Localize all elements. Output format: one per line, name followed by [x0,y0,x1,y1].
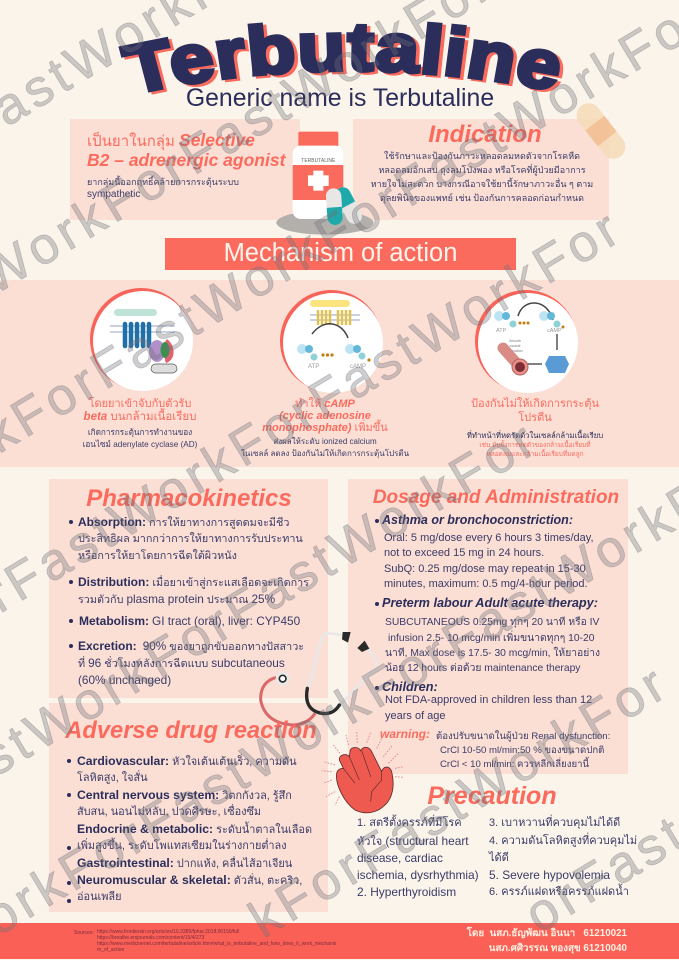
excretion: (60% unchanged) [78,673,171,687]
panel: pharmacokinetics [49,479,328,698]
precaution list: column two: 3. เบาหวานที่ควบคุมไม่ได้ดี [489,817,620,829]
indication heading: Indication [428,121,542,148]
icon: stethoscope [259,632,378,726]
subtitle: Generic name is Terbutaline [186,85,494,112]
sources: https://www.frontiersin.org/articles/10.3389/fphar.2018.00150/full [97,929,239,935]
preterm labour dosing: Preterm labour Adult acute therapy: [382,596,598,610]
icon: beta receptor [90,288,193,391]
text: step one: เกิดการกระตุ้นการทำงานของ [88,428,192,437]
icon: smooth muscle relaxation: muscle [509,344,521,348]
icon: smooth muscle relaxation [475,290,578,393]
sources [74,929,336,953]
drug class heading: B2 – adrenergic agonist [87,150,285,170]
text: step two: ส่งผลให้ระดับ ionized calcium [273,437,377,446]
text: step three: หลอดลมและกล้ามเนื้อเรียบที่มดลูก [486,451,584,458]
warning: warning: [380,727,430,741]
dosage heading: Dosage and Administration [373,487,619,508]
banner: mechanism of action: Mechanism of action [224,239,457,267]
text: step three [467,397,603,458]
precaution list: column one: หัวใจ (structural heart [357,834,469,848]
icon: cAMP conversion: cAMP [350,364,366,370]
indication text: หลอดลมอักเสบ ถุงลมโป่งพอง หรือโรคที่ผู้ป่วยมีอาการ [378,165,586,175]
footer [0,923,679,959]
title: Terbutaline [124,24,564,95]
icon: raised hand [322,732,403,814]
asthma dosing: SubQ: 0.25 mg/dose may repeat in 15-30 [384,563,586,575]
authors: นสภ.ศศิวรรณ ทองสุข 61210040 [489,943,627,954]
pharmacokinetics heading: Pharmacokinetics [86,485,292,512]
precaution list: column one: ischemia, dysrhythmia) [357,868,479,882]
icon: smooth muscle relaxation: ATP [496,328,507,334]
banner: mechanism of action [165,238,516,270]
precaution list: column two: 4. ความดันโลหิตสูงที่ควบคุมไม่ [489,835,637,847]
children dosing [375,680,592,722]
warning [380,727,610,770]
warning: CrCl < 10 ml/min: ควรหลีกเลี่ยงยานี้ [440,759,589,770]
sources: https://www.medicinenet.com/terbutaline/article.htm#what_is_terbutaline_and_how_does_it_work_mechanis [97,941,336,947]
drug class heading [87,130,286,170]
icon: cAMP conversion [280,290,383,393]
heading: precaution: Precaution [427,782,557,810]
precaution list: column one: 1. สตรีตั้งครรภ์ที่มีโรค [357,817,462,829]
precaution list: column one [357,814,479,899]
adverse reaction list: Gastrointestinal: ปากแห้ง, คลื่นไส้อาเจียน [77,856,292,870]
text: step two: monophosphate) เพิ่มขึ้น [262,422,388,434]
adverse reaction list: โลหิตสูง, ใจสั่น [77,772,148,784]
adverse reaction list: Cardiovascular: หัวใจเต้นเต้นเร็ว, ความดัน [77,754,297,768]
preterm labour dosing: SUBCUTANEOUS 0.25mg ทุกๆ 20 นาที หรือ IV [385,617,599,628]
heading: adverse drug reaction: Adverse drug reaction [65,718,317,744]
text: step three: โปรตีน [518,412,552,424]
preterm labour dosing: infusion 2.5- 10 mcg/min เพิ่มขนาดทุกๆ 10-20 [388,633,594,644]
adverse reaction list: เพิ่มสูงขึ้น, ระดับโพแทสเซียมในร่างกายต่ำลง [77,840,287,852]
text: step three: ป้องกันไม่ให้เกิดการกระตุ้น [471,398,599,410]
asthma dosing [375,513,594,590]
adverse reaction list: สับสน, นอนไม่หลับ, ปวดศีรษะ, เซื่องซึม [77,806,261,818]
drug class text [87,176,239,200]
precaution list: column one: 2. Hyperthyroidism [357,885,456,899]
precaution list: column one: disease, cardiac [357,851,443,865]
panel: drug class [70,119,300,220]
excretion: ที่ 96 ชั่วโมงหลังการฉีดแบบ subcutaneous [78,656,285,670]
icon: smooth muscle relaxation: relaxation [507,349,523,353]
distribution: รวมตัวกับ plasma protein ประมาณ 25% [78,592,275,606]
adverse reaction list: Endocrine & metabolic: ระดับน้ำตาลในเลือด [77,822,312,836]
icon: bandage [576,103,626,159]
panel: dosage and administration [348,479,628,774]
panel: adverse drug reaction [49,703,328,912]
asthma dosing: Asthma or bronchoconstriction: [382,513,573,527]
text: step two: (cyclic adenosine [279,410,371,422]
absorption [69,515,303,562]
icon: cAMP conversion: ATP [308,364,319,370]
text: step one: beta บนกล้ามเนื้อเรียบ [84,411,196,423]
excretion: Excretion: 90% ของยาถูกขับออกทางปัสสาวะ [78,639,304,653]
metabolism: Metabolism: GI tract (oral), liver: CYP450 [79,614,300,628]
drug class text: sympathetic [87,189,140,200]
absorption: Absorption: การให้ยาทางการสูดดมจะมีชีว [78,515,289,529]
icon: smooth muscle relaxation: Smooth [509,339,521,343]
adverse reaction list: อ่อนเพลีย [77,891,121,903]
asthma dosing: Oral: 5 mg/dose every 6 hours 3 times/day, [384,532,594,544]
adverse reaction list [67,754,312,903]
distribution: Distribution: เมื่อยาเข้าสู่กระแสเลือดจะเกิดการ [78,575,309,589]
precaution list: column two: 5. Severe hypovolemia [489,868,610,882]
sources: m_of_action [97,947,124,953]
excretion [69,639,304,687]
warning: ต้องปรับขนาดในผู้ป่วย Renal dysfunction: [436,731,610,742]
preterm labour dosing: นาที, Max dose is 17.5- 30 mcg/min, ให้ยาอย่าง [385,648,600,659]
text: step three: ที่ทำหน้าที่หดรัดตัวในเซลล์กล้ามเนื้อเรียบ [467,431,603,440]
indication text [371,150,593,204]
indication text: หายใจไม่สะดวก บางกรณีอาจใช้ยานี้รักษาภาวะอื่น ๆ ตาม [371,179,593,189]
indication text: ดุลยพินิจของแพทย์ เช่น ป้องกันการคลอดก่อนกำหนด [380,193,584,203]
precaution list: column two: 6. ครรภ์แฝดหรือครรภ์แฝดน้ำ [489,886,629,898]
authors [466,926,627,954]
watermark: kForFastWorkFor [239,653,679,949]
icon: smooth muscle relaxation: cAMP [547,328,562,334]
text: step one: เอนไซม์ adenylate cyclase (AD) [83,440,197,449]
absorption: หรือการให้ยาโดยการฉีดใต้ผิวหนัง [78,550,237,562]
text: step two: ในเซลล์ ลดลง ป้องกันไม่ให้เกิดการกระตุ้นโปรตีน [241,449,409,458]
asthma dosing: not to exceed 15 mg in 24 hours. [384,547,544,559]
preterm labour dosing [375,596,600,674]
children dosing: Children: [382,680,438,694]
absorption: ประสิทธิผล มากกว่าการให้ยาทางการรับประทาน [78,533,303,545]
text: step two: ทำให้ cAMP [295,398,355,410]
panel: indication [353,119,609,220]
text: step one: โดยยาเข้าจับกับตัวรับ [89,398,191,410]
precaution list: column two: ได้ดี [489,852,509,864]
children dosing: Not FDA-approved in children less than 12 [385,694,592,706]
text: step three: เช่น ยับยั้งการหดตัวของกล้ามเนื้อเรียบที่ [479,442,591,449]
panel: mechanism of action [0,280,679,467]
text: step two [241,397,409,458]
preterm labour dosing: น้อย 12 hours ต่อด้วย maintenance therapy [385,663,580,674]
warning: CrCl 10-50 ml/min:50 % ของขนาดปกติ [440,745,604,756]
text: step one [83,397,197,449]
icon: medicine bottle with pills [276,132,374,235]
sources: https://breathe.ersjournals.com/content/15/4/273 [97,935,204,941]
distribution [69,575,309,606]
sources: Sources: [74,930,94,936]
precaution list: column two [488,814,637,898]
title: Terbutaline [118,22,560,93]
indication text: ใช้รักษาและป้องกันภาวะหลอดลมหดตัวจากโรคหืด [384,151,580,161]
icon: medicine bottle with pills: TERBUTALINE [301,158,336,164]
drug class heading: เป็นยาในกลุ่ม Selective [87,130,255,150]
children dosing: years of age [385,710,446,722]
adverse reaction list: Central nervous system: วิตกกังวล, รู้สึก [77,788,292,802]
adverse reaction list: Neuromuscular & skeletal: ตัวสั่น, ตะคริว, [77,873,302,887]
asthma dosing: minutes, maximum: 0.5 mg/4-hour period. [384,578,588,590]
authors: โดย นสภ.ธัญพัฒน อินนา 61210021 [467,928,627,939]
drug class text: ยากลุ่มนี้ออกฤทธิ์คล้ายการกระตุ้นระบบ [87,177,239,187]
